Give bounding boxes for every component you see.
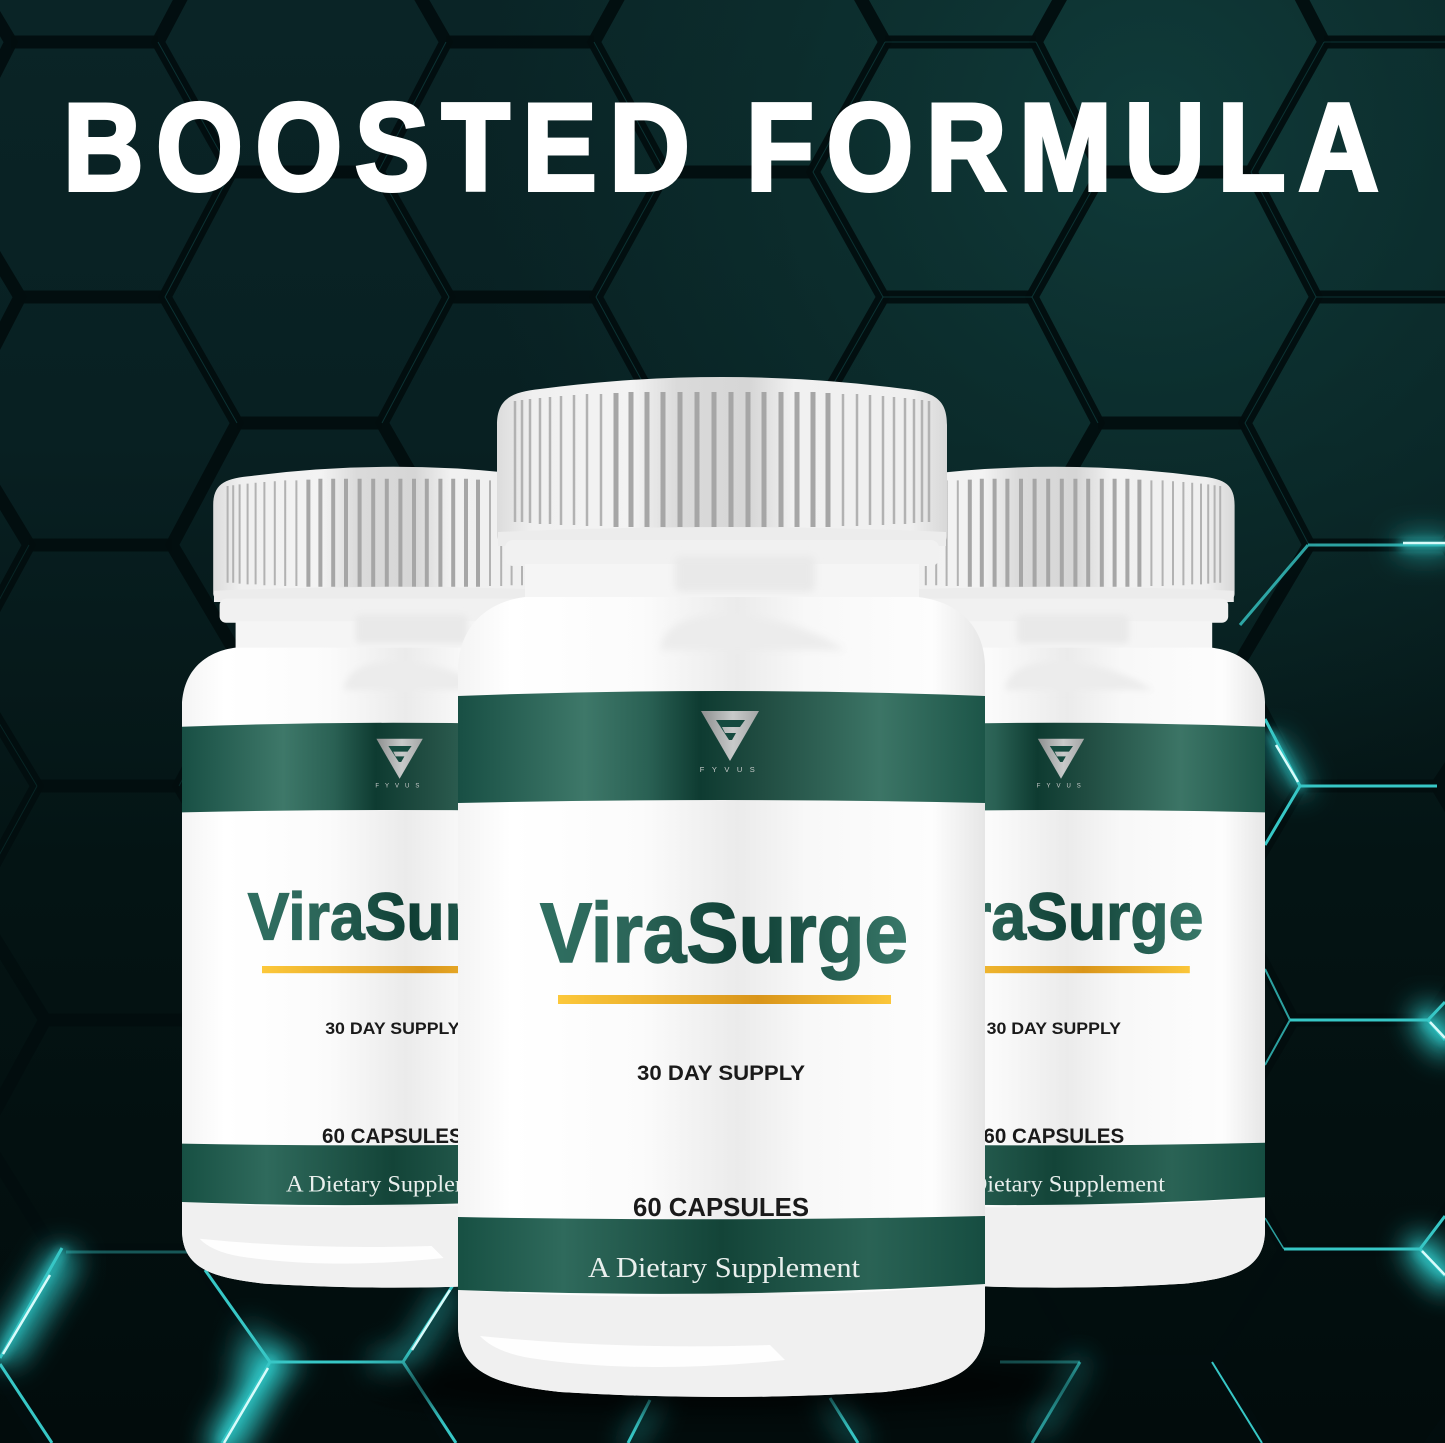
center bottle body (458, 540, 985, 1397)
left bottle logo (375, 739, 425, 790)
center bottle (458, 377, 985, 1397)
right bottle body (843, 599, 1265, 1288)
center bottle cap (497, 377, 947, 546)
center bottle yellow rule (558, 995, 891, 1004)
right bottle lower label band (843, 1143, 1265, 1205)
right bottle top label band (843, 723, 1265, 812)
left bottle logo: FYVUS (375, 784, 425, 790)
right bottle yellow rule (923, 966, 1190, 973)
right bottle supply text: 30 DAY SUPPLY (987, 1019, 1121, 1038)
center bottle capsule text: 60 CAPSULES (633, 1192, 809, 1222)
left bottle yellow rule (262, 966, 528, 973)
right bottle product name: ViraSurge (909, 880, 1203, 955)
left bottle body (182, 599, 604, 1288)
shadow under bottles (362, 1359, 1082, 1411)
left bottle supply text: 30 DAY SUPPLY (325, 1019, 460, 1038)
left bottle lower label band (182, 1143, 604, 1205)
right bottle logo: FYVUS (1037, 784, 1087, 790)
center bottle logo (700, 711, 762, 774)
right bottle capsule text: 60 CAPSULES (983, 1125, 1124, 1148)
right bottle dietary text: A Dietary Supplement (947, 1172, 1166, 1198)
center bottle lower label band (458, 1216, 985, 1294)
right bottle logo (1037, 739, 1087, 790)
neon glowing hexagon edges (0, 543, 1445, 1443)
center bottle supply text: 30 DAY SUPPLY (637, 1062, 805, 1085)
neon glow: soft halos (0, 545, 1445, 1443)
center bottle product name: ViraSurge (540, 886, 908, 980)
left bottle (182, 467, 604, 1288)
left bottle cap (213, 467, 573, 602)
left bottle product name: ViraSurge (248, 880, 542, 955)
right bottle cap (875, 467, 1235, 602)
left bottle dietary text: A Dietary Supplement (286, 1172, 504, 1198)
left bottle capsule text: 60 CAPSULES (322, 1125, 463, 1148)
center bottle logo: FYVUS (700, 765, 762, 774)
center bottle top label band (458, 691, 985, 803)
left bottle top label band (182, 723, 604, 812)
title: BOOSTED FORMULA (63, 78, 1379, 216)
center bottle dietary text: A Dietary Supplement (588, 1252, 860, 1284)
right bottle (843, 467, 1265, 1288)
